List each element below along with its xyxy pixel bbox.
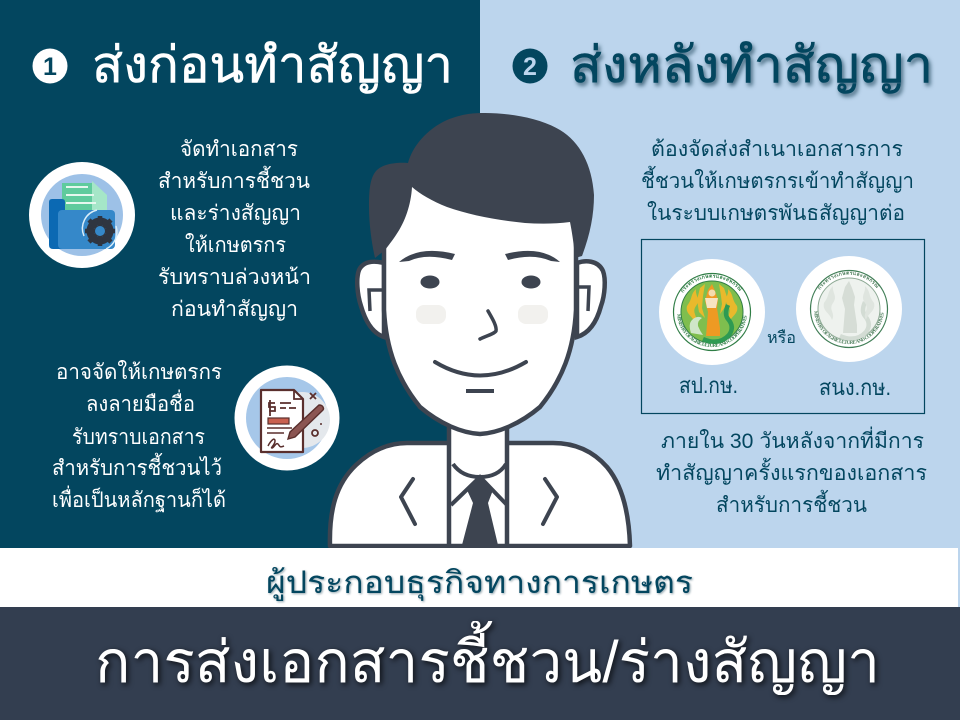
heading: before contract: ส่งก่อนทำสัญญา [92,37,453,93]
banner: audience: ผู้ประกอบธุรกิจทางการเกษตร [266,565,693,602]
text block: prepare documents: สำหรับการชี้ชวน [158,166,310,193]
icon: ministry seal pale [796,256,902,362]
text block: prepare documents: และร่างสัญญา [170,202,301,225]
face [384,172,576,434]
text block: within 30 days: ทำสัญญาครั้งแรกของเอกสาร [656,458,927,485]
text block: within 30 days: สำหรับการชี้ชวน [716,490,867,517]
icon: ministry seal colour [659,259,765,365]
icon: signed document with pen [234,366,340,470]
heading: after contract: 2 [523,53,537,81]
text block: farmer acknowledgement: อาจจัดให้เกษตรกร [56,360,222,384]
label: ONAB MOAC: สนง.กษ. [819,375,891,400]
lapels [401,479,557,524]
tie [462,479,498,545]
brows [399,251,560,262]
text block: send copy requirement: ต้องจัดส่งสำเนาเอกสารการ [651,138,903,161]
text block: farmer acknowledgement: เพื่อเป็นหลักฐานก็ได้ [52,485,226,512]
text block: within 30 days [656,426,927,517]
panel: after contract background [480,0,960,548]
mouth [435,362,526,376]
text block: farmer acknowledgement: ลงลายมือชื่อ [86,389,195,416]
text block: send copy requirement: ชี้ชวนให้เกษตรกรเข้าทำสัญญา [641,166,914,193]
text block: prepare documents: ให้เกษตรกร [185,233,286,257]
nose [480,311,496,339]
chin [466,389,494,393]
icon: folder with gear [29,162,135,268]
hair [369,113,594,258]
icon: ministry seal colour: MINISTRY OF AGRICULTURE AND COOPERATIVES [677,314,747,348]
eyes [420,276,440,288]
neck [451,425,505,543]
panel: agencies box [640,238,926,414]
text block: farmer acknowledgement [52,360,226,512]
text block: send copy requirement [641,138,914,225]
icon: ministry seal pale: กระทรวงเกษตรและสหกรณ์ [818,272,880,290]
label: or: หรือ [767,329,796,347]
icon: ministry seal colour: กระทรวงเกษตรและสหกรณ์ [681,274,744,293]
text block: prepare documents: ก่อนทำสัญญา [171,298,298,321]
banner: main title: การส่งเอกสารชี้ชวน/ร่างสัญญา [95,621,880,695]
icon: ministry seal pale: MINISTRY OF AGRICULTURE AND COOPERATIVES [814,310,884,344]
text block: within 30 days: ภายใน 30 วันหลังจากที่มีการ [661,426,924,453]
text block: farmer acknowledgement: สำหรับการชี้ชวนไว้ [52,453,222,480]
text block: prepare documents: รับทราบล่วงหน้า [158,266,311,289]
text block: farmer acknowledgement: รับทราบเอกสาร [72,426,205,449]
panel: before contract background [0,0,480,548]
banner: audience [0,548,960,607]
heading: after contract: ส่งหลังทำสัญญา [570,37,933,93]
cheeks [416,305,446,324]
label: OPS MOAC: สป.กษ. [679,373,738,398]
illustration: businessman [330,113,630,546]
body [330,443,630,546]
heading: before contract: 1 [43,53,57,81]
text block: prepare documents [158,138,311,321]
banner: main title [0,607,960,720]
text block: prepare documents: จัดทำเอกสาร [180,138,298,161]
ears [357,262,384,337]
text block: send copy requirement: ในระบบเกษตรพันธสัญญาต่อ [647,201,905,225]
